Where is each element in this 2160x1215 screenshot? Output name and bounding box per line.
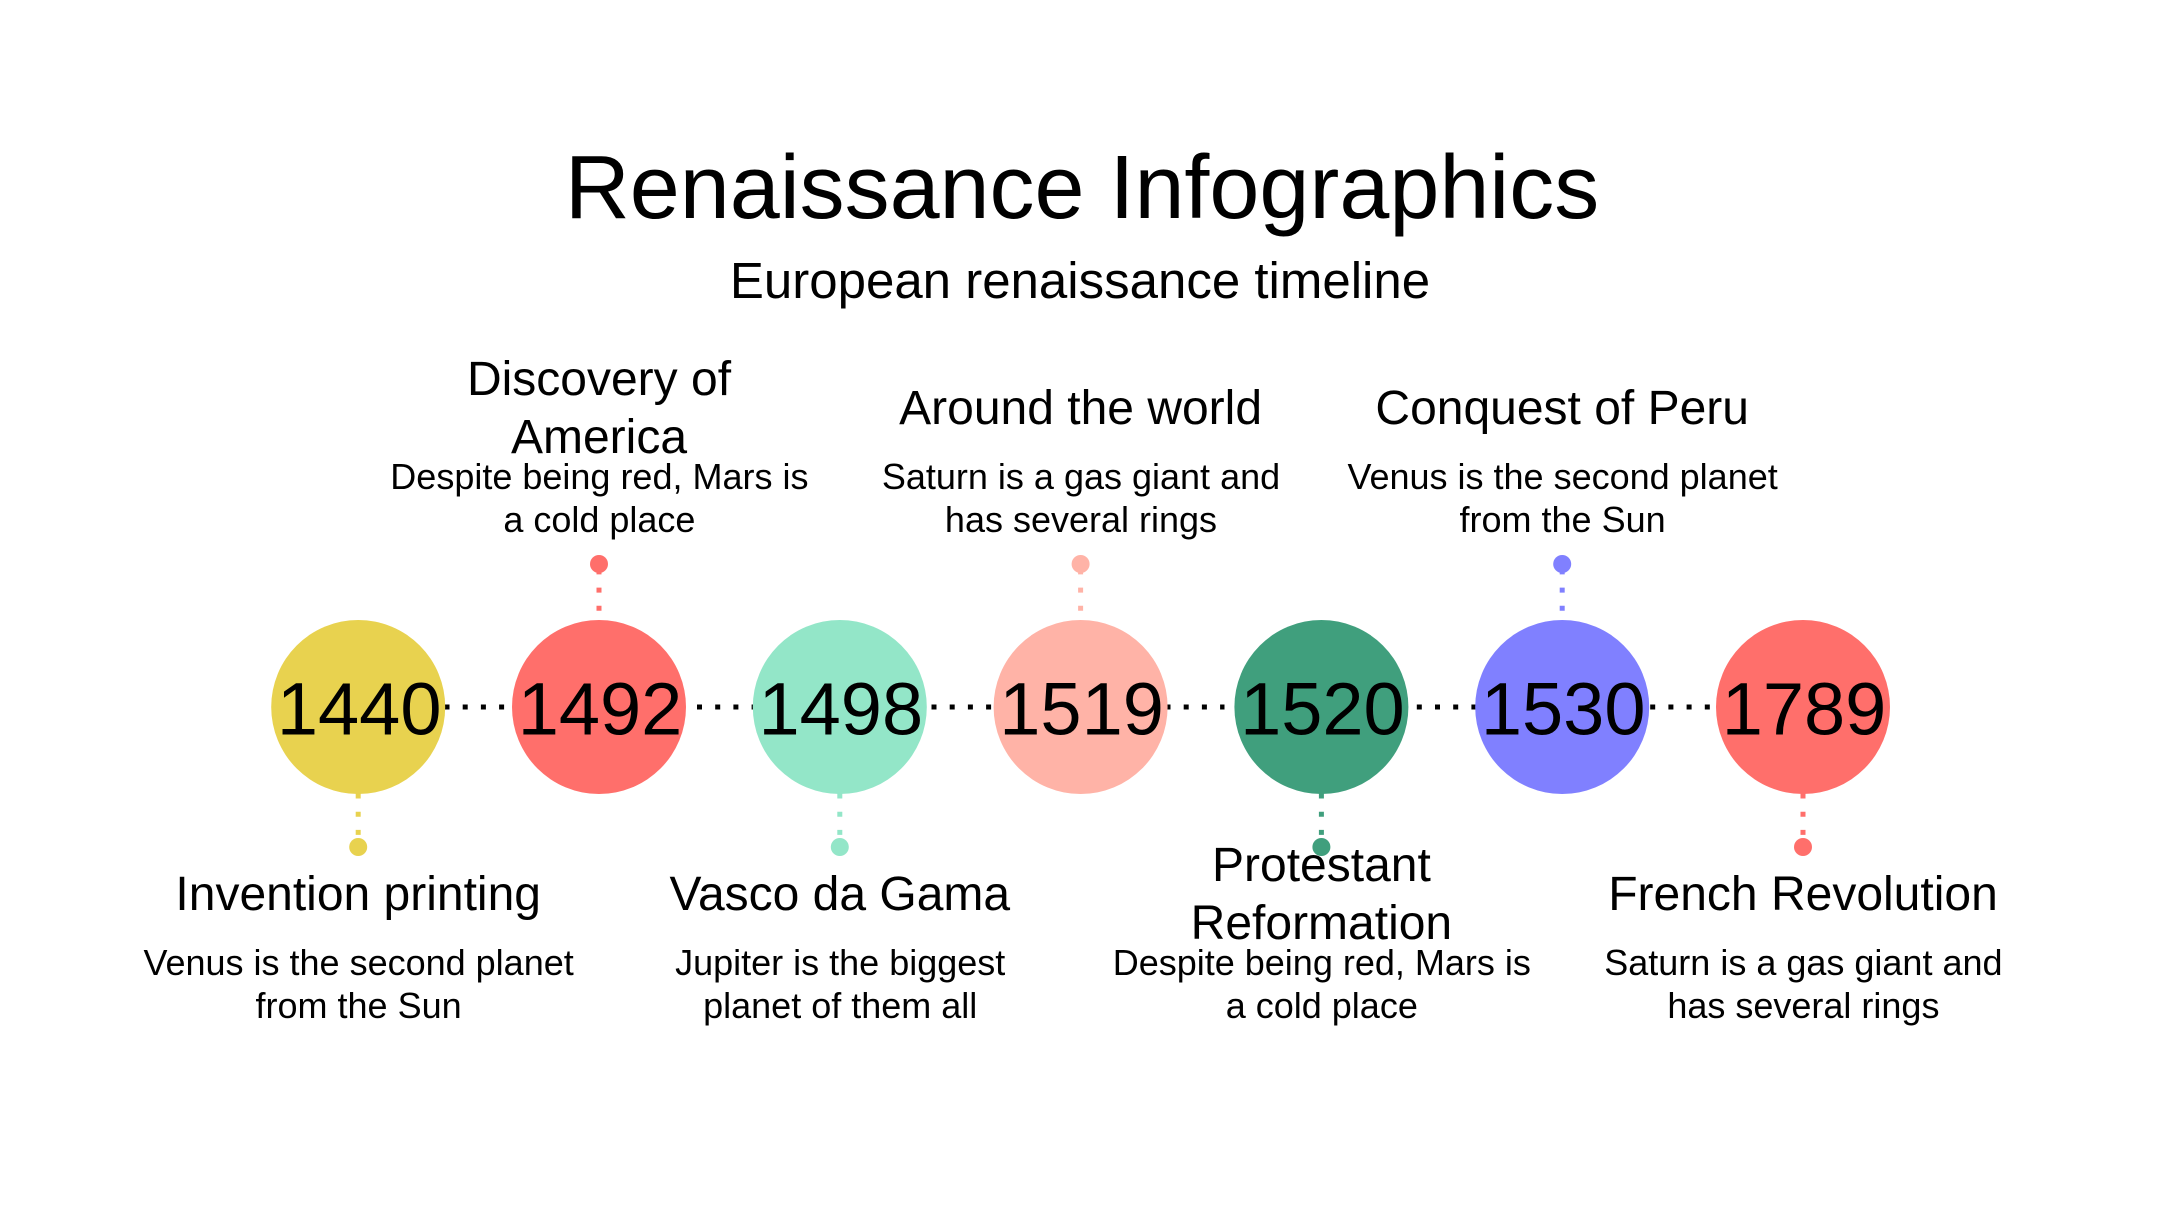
event: 1519 Around the world	[882, 382, 1280, 794]
event: 1492 Discovery of America: Discovery of	[467, 353, 732, 406]
event: 1789 French Revolution: Saturn is a gas giant and	[1604, 942, 2003, 983]
event: 1440 Invention printing	[143, 620, 574, 1026]
event: 1498 Vasco da Gama: 1498	[758, 668, 923, 750]
event: 1498 Vasco da Gama: Jupiter is the biggest	[675, 942, 1005, 983]
event: 1498 Vasco da Gama	[669, 620, 1010, 1026]
event: 1440 Invention printing: from the Sun	[256, 985, 462, 1026]
event: 1789 French Revolution: French Revolution	[1608, 868, 1998, 921]
event: 1440 Invention printing: Invention printing	[175, 868, 541, 921]
event: 1519 Around the world: Around the world	[899, 382, 1262, 435]
event: 1520 Protestant Reformation: Despite being red, Mars is	[1113, 942, 1531, 983]
event: 1498 Vasco da Gama: Vasco da Gama	[669, 868, 1010, 921]
event: 1492 Discovery of America	[390, 353, 808, 794]
event: 1520 Protestant Reformation: a cold place	[1226, 985, 1418, 1026]
event: 1520 Protestant Reformation: Reformation	[1191, 897, 1452, 950]
event: 1492 Discovery of America: Despite being red, Mars is	[390, 456, 808, 497]
event: 1520 Protestant Reformation: Protestant	[1212, 839, 1431, 892]
event: 1519 Around the world: 1519	[999, 668, 1164, 750]
event: 1492 Discovery of America: 1492	[518, 668, 682, 750]
event: 1530 Conquest of Peru: Conquest of Peru	[1375, 382, 1749, 435]
event: 1789 French Revolution: 1789	[1722, 668, 1886, 750]
event: 1519 Around the world: has several rings	[945, 499, 1217, 540]
title: Renaissance Infographics	[565, 138, 1599, 238]
event: 1519 Around the world: Saturn is a gas giant and	[882, 456, 1280, 497]
timeline connector	[444, 704, 1710, 710]
event: 1520 Protestant Reformation: 1520	[1240, 668, 1405, 750]
event: 1440 Invention printing: Venus is the second planet	[143, 942, 574, 983]
event: 1440 Invention printing: 1440	[277, 668, 442, 750]
event: 1789 French Revolution: has several rings	[1667, 985, 1939, 1026]
event: 1492 Discovery of America: a cold place	[503, 499, 695, 540]
event: 1530 Conquest of Peru: from the Sun	[1460, 499, 1666, 540]
subtitle: European renaissance timeline	[730, 252, 1430, 309]
event: 1492 Discovery of America: America	[511, 411, 687, 464]
event: 1520 Protestant Reformation	[1113, 620, 1531, 1026]
event: 1498 Vasco da Gama: planet of them all	[703, 985, 977, 1026]
event: 1530 Conquest of Peru: 1530	[1481, 668, 1646, 750]
event: 1530 Conquest of Peru: Venus is the second planet	[1347, 456, 1778, 497]
event: 1789 French Revolution	[1604, 620, 2003, 1026]
event: 1530 Conquest of Peru	[1347, 382, 1778, 794]
